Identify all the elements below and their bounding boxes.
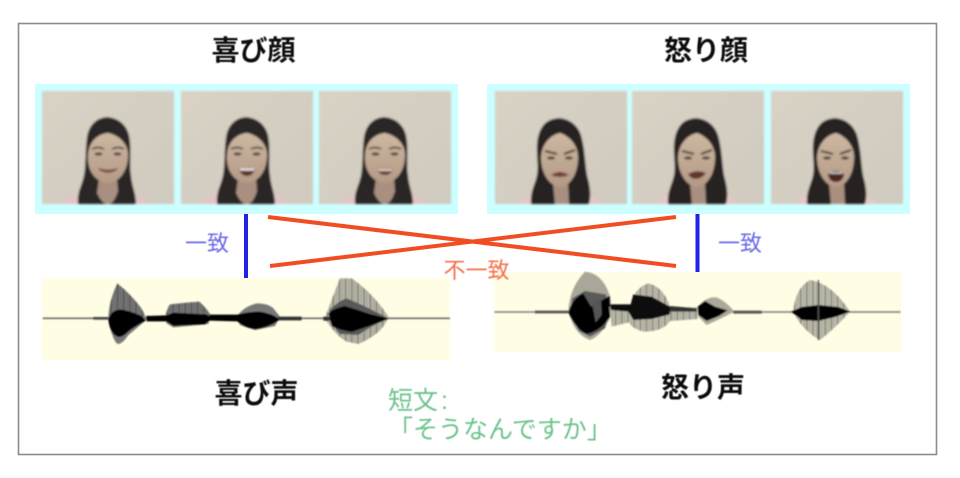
panel: happy voice waveform xyxy=(42,278,450,360)
photo: angry face 1 xyxy=(495,91,627,204)
label: match left: 一致 xyxy=(185,231,229,256)
panel: happy face photos xyxy=(35,84,458,214)
panel: angry face photos xyxy=(487,84,910,214)
heading: angry face: 怒り顔 xyxy=(664,35,748,66)
heading: angry voice: 怒り声 xyxy=(661,372,745,403)
text: short sentence label: : xyxy=(441,387,448,415)
connector: angry match line xyxy=(696,214,700,272)
waveform: happy xyxy=(43,278,450,344)
connector: happy match line xyxy=(244,214,248,278)
photo: happy face 3 xyxy=(319,91,451,204)
text: short sentence label: 短文 xyxy=(388,387,438,415)
label: match right: 一致 xyxy=(718,231,762,256)
panel: angry voice waveform xyxy=(494,272,901,352)
heading: happy voice: 喜び声 xyxy=(214,378,299,409)
text: short sentence: 「そうなんですか」 xyxy=(388,416,612,444)
photo: happy face 2 xyxy=(181,91,313,204)
heading: happy face: 喜び顔 xyxy=(211,35,296,66)
label: mismatch: 不一致 xyxy=(443,258,510,283)
photo: happy face 1 xyxy=(42,91,174,204)
waveform: angry xyxy=(494,272,901,340)
photo: angry face 3 xyxy=(771,91,903,204)
photo: angry face 2 xyxy=(632,91,764,204)
connector: mismatch lines xyxy=(268,217,676,266)
